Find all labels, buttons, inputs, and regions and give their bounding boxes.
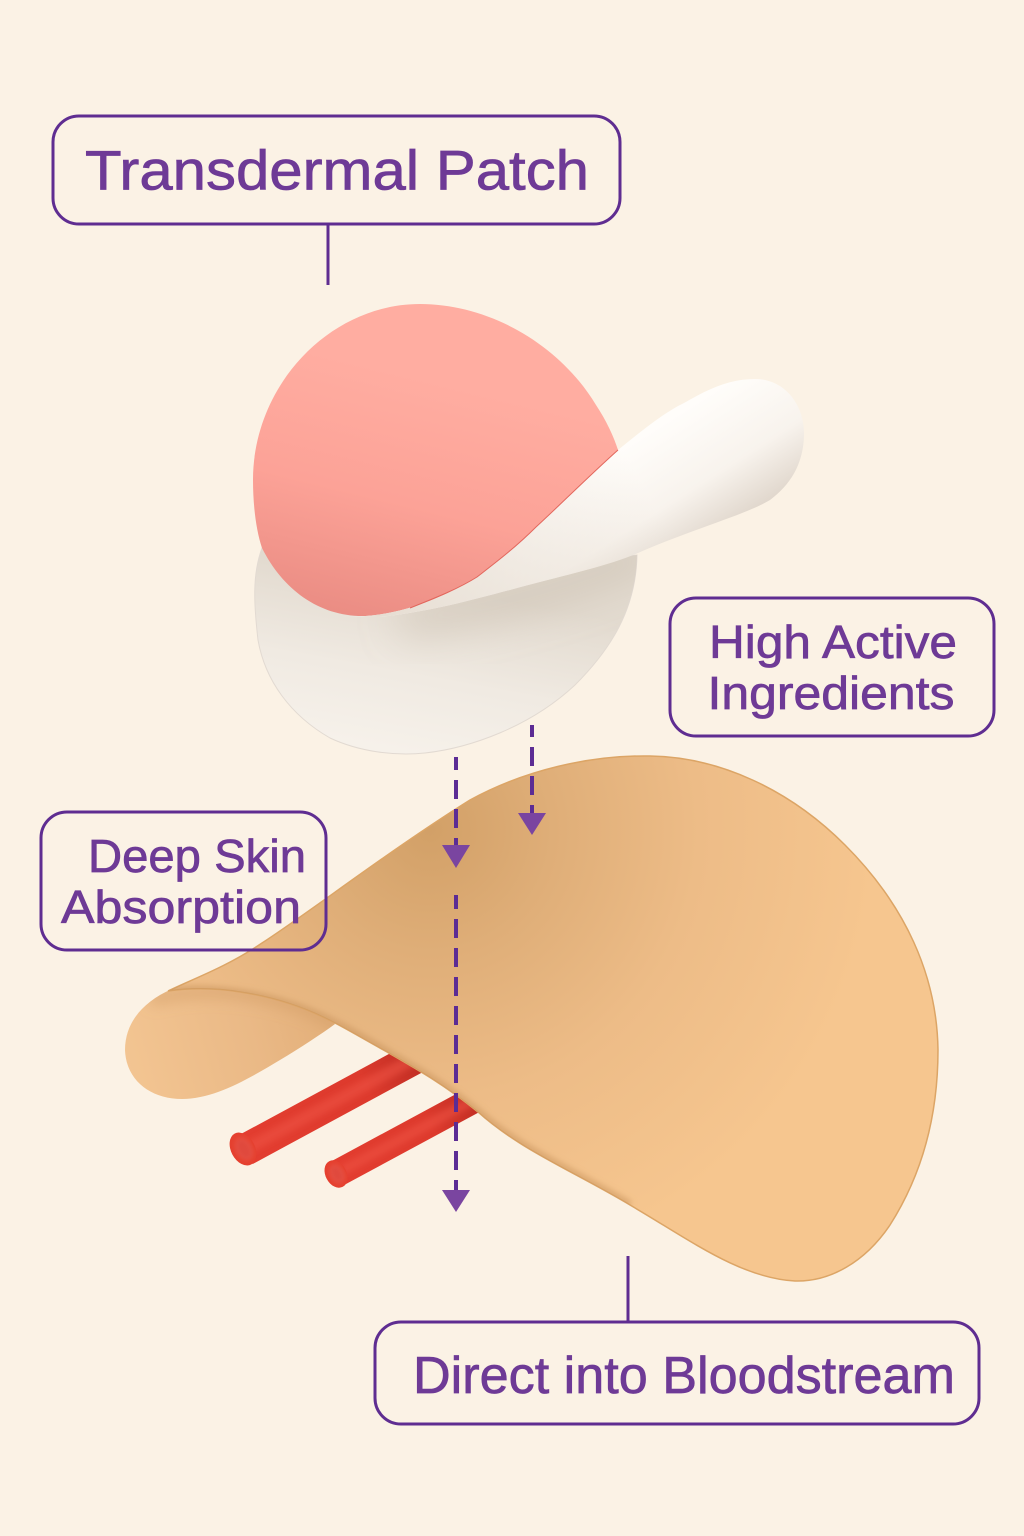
label: Direct into Bloodstream xyxy=(375,1322,979,1424)
label: High Active Ingredients: High Active xyxy=(709,616,957,668)
pink adhesive patch xyxy=(253,304,618,616)
arrow: patch to skin, right xyxy=(518,725,546,835)
infographic canvas xyxy=(40,114,996,1426)
vessel one xyxy=(224,1050,430,1170)
patch backing sheet xyxy=(255,548,650,754)
skin main surface xyxy=(168,756,938,1281)
label: High Active Ingredients xyxy=(670,598,994,736)
leader line from title to patch xyxy=(326,224,330,285)
label: Deep Skin Absorption xyxy=(41,812,326,950)
label: High Active Ingredients: Ingredients xyxy=(708,667,954,719)
illustration: transdermal patch xyxy=(253,304,804,754)
title label: Transdermal Patch xyxy=(53,116,620,224)
label: Direct into Bloodstream: Direct into Bloodstream xyxy=(413,1347,955,1405)
title label: Transdermal Patch: Transdermal Patch xyxy=(85,138,589,202)
peeled white curl xyxy=(340,379,804,617)
label: Deep Skin Absorption: Deep Skin xyxy=(88,830,306,882)
label: Deep Skin Absorption: Absorption xyxy=(61,881,301,933)
illustration: skin layer xyxy=(125,756,938,1281)
arrow: skin to bloodstream xyxy=(442,895,470,1212)
vessel two xyxy=(320,1091,490,1192)
blood vessels xyxy=(224,1050,490,1192)
skin fold underside xyxy=(125,990,335,1099)
leader line from skin to bloodstream label xyxy=(626,1256,630,1322)
arrow: patch to skin, left xyxy=(442,757,470,868)
